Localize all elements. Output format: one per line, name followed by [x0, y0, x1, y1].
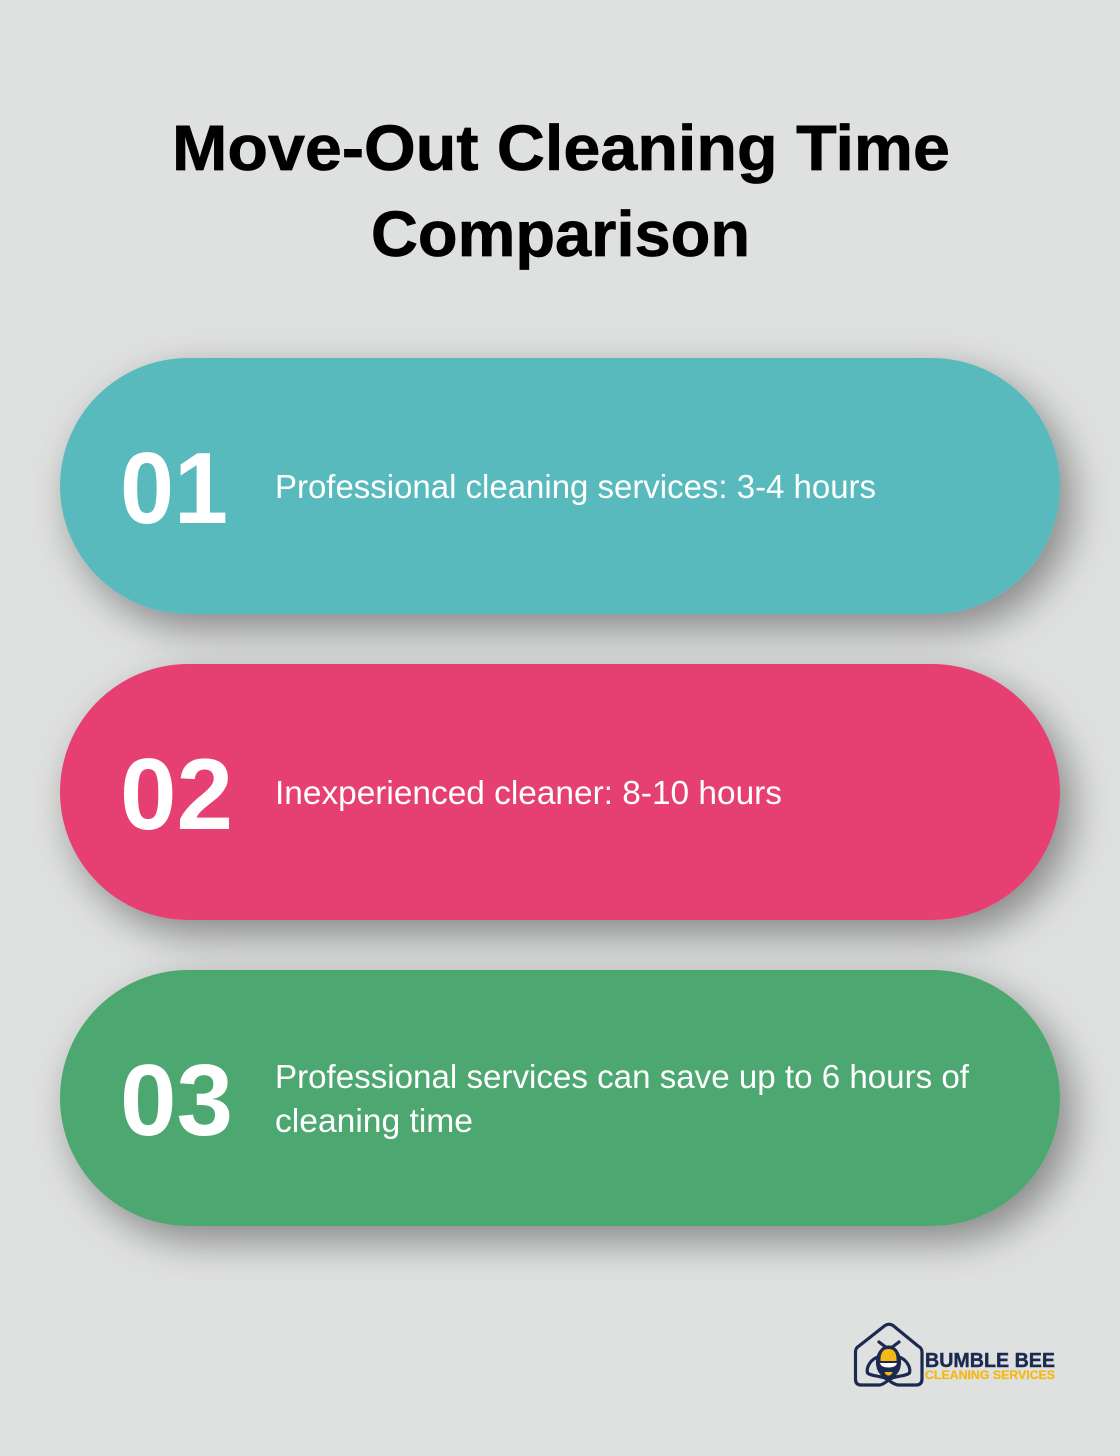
title — [172, 112, 950, 270]
pill background: green — [60, 970, 1060, 1226]
number 01: 01 — [120, 433, 228, 545]
text: time saved — [275, 1058, 970, 1139]
title: Move-Out Cleaning Time — [172, 112, 950, 184]
text: time saved: Professional services can save up to 6 hours of — [275, 1058, 970, 1095]
text: time saved: cleaning time — [275, 1102, 473, 1139]
panel: inexperienced cleaner — [60, 664, 1060, 920]
pill background: pink — [60, 664, 1060, 920]
logo wordmark: BUMBLE BEE — [925, 1350, 1055, 1372]
icon: house with bee — [856, 1324, 922, 1385]
logo: Bumble Bee Cleaning Services — [856, 1324, 1055, 1385]
text: professional time: Professional cleaning services: 3-4 hours — [275, 468, 876, 505]
text: inexperienced time: Inexperienced cleaner: 8-10 hours — [275, 774, 782, 811]
logo tagline: CLEANING SERVICES — [925, 1368, 1055, 1382]
pill background: teal — [60, 358, 1060, 614]
panel: professional cleaning services — [60, 358, 1060, 614]
panel: time saved — [60, 970, 1060, 1226]
title: Comparison — [371, 198, 750, 270]
number 03: 03 — [120, 1045, 233, 1157]
number 02: 02 — [120, 739, 233, 851]
